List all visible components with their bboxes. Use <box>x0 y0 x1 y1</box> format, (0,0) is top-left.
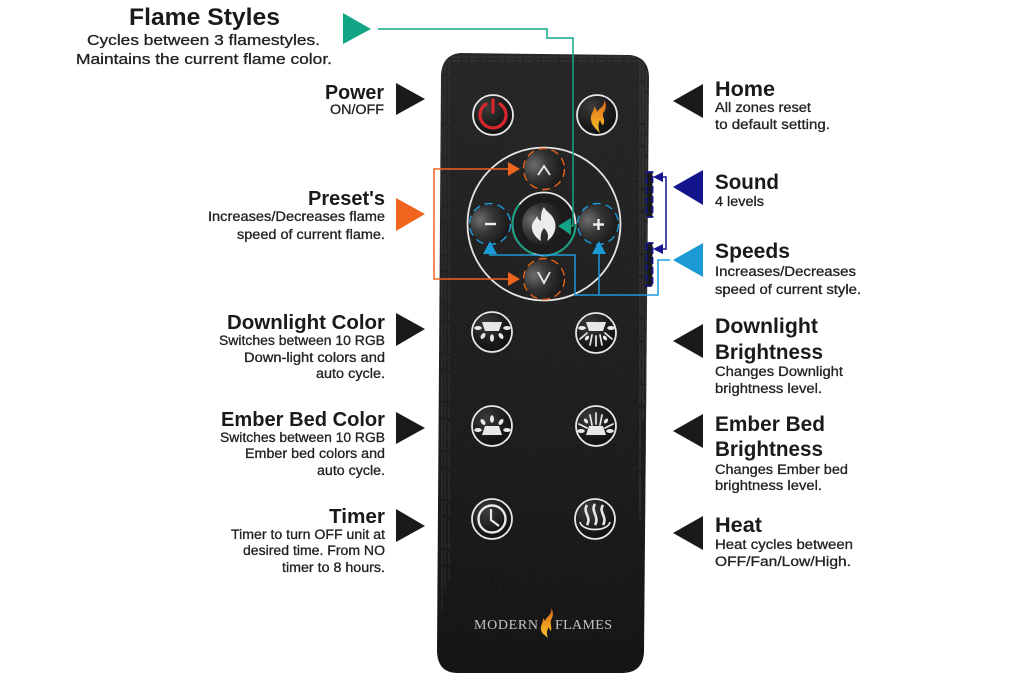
ember bed brightness button <box>576 406 616 446</box>
label: Timer <box>231 506 425 575</box>
label: Downlight Color: Switches between 10 RGB <box>219 333 385 348</box>
navy connector arrows: sound <box>653 172 666 254</box>
label: Speeds <box>673 240 861 297</box>
Modern Flames logo <box>474 608 612 638</box>
heat button <box>575 499 615 539</box>
label: Downlight Brightness: brightness level. <box>715 381 822 396</box>
label: Sound <box>673 170 779 209</box>
downlight color button <box>472 312 512 352</box>
label: Ember Bed Brightness: brightness level. <box>715 478 822 493</box>
label: Speeds: speed of current style. <box>715 282 861 297</box>
label: Ember Bed Brightness: Ember Bed <box>715 413 825 436</box>
label: Home <box>673 78 830 132</box>
label: Timer: desired time. From NO <box>243 543 385 558</box>
label: Downlight Brightness: Changes Downlight <box>715 364 843 379</box>
plus button <box>578 204 618 244</box>
label: Downlight Color: auto cycle. <box>316 366 385 381</box>
ember bed color button <box>472 406 512 446</box>
label: Preset's: Preset's <box>308 188 385 210</box>
down button <box>524 258 564 300</box>
label: Downlight Color: Downlight Color <box>227 312 385 334</box>
label: Ember Bed Color <box>220 409 425 478</box>
side button dashed outlines <box>646 172 652 286</box>
directional button cluster <box>468 148 620 300</box>
label: Timer: timer to 8 hours. <box>282 560 385 575</box>
label: Ember Bed Color: auto cycle. <box>317 463 385 478</box>
orange connector arrows: presets <box>434 162 520 286</box>
label: Ember Bed Brightness: Changes Ember bed <box>715 462 848 477</box>
label: Timer: Timer to turn OFF unit at <box>231 527 385 542</box>
label: Timer: Timer <box>329 506 385 528</box>
blue connector arrows: speeds <box>483 241 670 295</box>
label: Heat <box>673 514 853 569</box>
label: Ember Bed Color: Switches between 10 RGB <box>220 430 385 445</box>
label: Home: All zones reset <box>715 100 811 115</box>
label: Power: Power <box>325 82 384 104</box>
label: Downlight Brightness <box>673 315 843 396</box>
label: Downlight Brightness: Brightness <box>715 341 823 364</box>
label: Heat: Heat <box>715 514 762 537</box>
label: Ember Bed Color: Ember bed colors and <box>245 446 385 461</box>
remote control body <box>437 53 650 673</box>
label: Downlight Color <box>219 312 425 381</box>
power button <box>473 95 513 135</box>
label: Home: to default setting. <box>715 117 830 132</box>
label: Preset's <box>208 188 425 242</box>
label: Power: ON/OFF <box>330 102 384 117</box>
label: Flame Styles: Flame Styles <box>129 4 280 31</box>
label: Flame Styles: Cycles between 3 flamestyles. <box>87 32 320 49</box>
label: Ember Bed Brightness <box>673 413 848 493</box>
Modern Flames logo: FLAMES <box>555 618 612 633</box>
label: Speeds: Speeds <box>715 240 790 263</box>
label: Home: Home <box>715 78 775 101</box>
Modern Flames logo: MODERN <box>474 618 538 633</box>
label: Sound: Sound <box>715 171 779 194</box>
label: Ember Bed Color: Ember Bed Color <box>221 409 385 431</box>
label: Flame Styles: Maintains the current flame color. <box>76 51 332 68</box>
home flame button <box>577 95 617 135</box>
green connector arrow: flame styles <box>378 29 573 235</box>
label: Preset's: Increases/Decreases flame <box>208 209 385 224</box>
label: Downlight Color: Down-light colors and <box>244 350 385 365</box>
label: Ember Bed Brightness: Brightness <box>715 438 823 461</box>
label: Flame Styles <box>76 4 371 68</box>
up button <box>524 148 564 190</box>
center flame button <box>512 192 576 256</box>
label: Downlight Brightness: Downlight <box>715 315 818 338</box>
label: Speeds: Increases/Decreases <box>715 264 856 279</box>
label: Heat: OFF/Fan/Low/High. <box>715 554 851 569</box>
label: Heat: Heat cycles between <box>715 537 853 552</box>
minus button <box>470 204 510 244</box>
label: Preset's: speed of current flame. <box>237 227 385 242</box>
label: Power <box>325 82 425 117</box>
label: Sound: 4 levels <box>715 194 764 209</box>
downlight brightness button <box>576 313 616 353</box>
timer button <box>472 499 512 539</box>
